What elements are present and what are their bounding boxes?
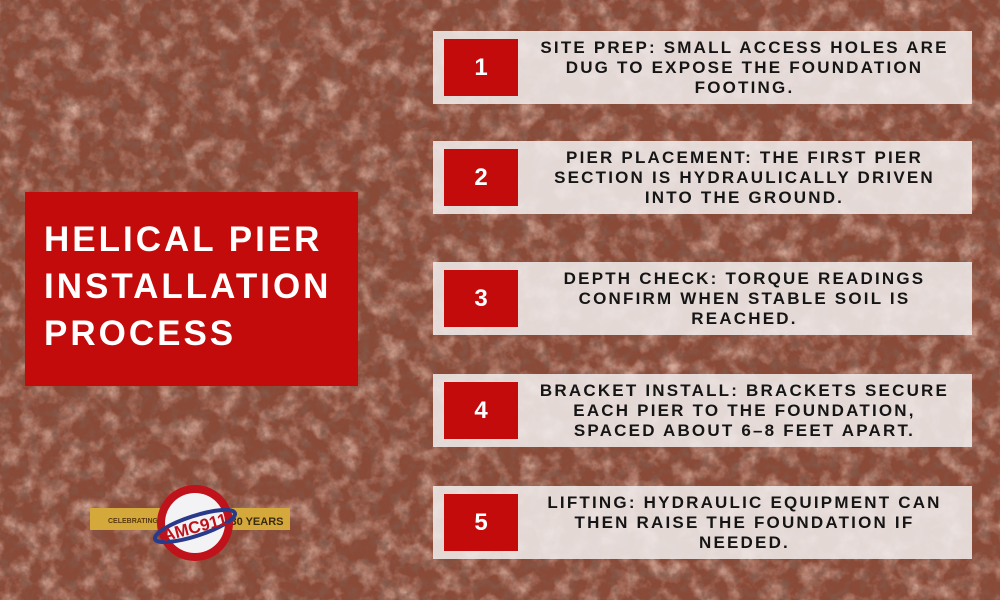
logo: CELEBRATING bbox=[108, 518, 159, 525]
step 5: 5 bbox=[474, 508, 488, 536]
step 1 bbox=[433, 31, 972, 104]
title: PROCESS bbox=[44, 314, 236, 353]
logo bbox=[90, 485, 290, 561]
step 3: 3 bbox=[474, 284, 488, 312]
step 5 bbox=[433, 486, 972, 559]
logo: 30 YEARS bbox=[230, 516, 284, 528]
title: INSTALLATION bbox=[44, 267, 331, 306]
step 4: 4 bbox=[474, 396, 488, 424]
step 4 bbox=[433, 374, 972, 447]
step 2 bbox=[433, 141, 972, 214]
step 3 bbox=[433, 262, 972, 335]
step 1: SITE PREP: SMALL ACCESS HOLES ARE DUG TO EXPOSE THE FOUNDATION FOOTING. bbox=[540, 38, 949, 96]
step 2: PIER PLACEMENT: THE FIRST PIER SECTION IS HYDRAULICALLY DRIVEN INTO THE GROUND. bbox=[554, 148, 935, 206]
step 1: 1 bbox=[474, 54, 488, 80]
logo: AMC911 bbox=[160, 510, 229, 545]
step 4: BRACKET INSTALL: BRACKETS SECURE EACH PIER TO THE FOUNDATION, SPACED ABOUT 6–8 FEET APART. bbox=[540, 380, 949, 440]
title bbox=[25, 192, 358, 386]
step 3: DEPTH CHECK: TORQUE READINGS CONFIRM WHEN STABLE SOIL IS REACHED. bbox=[564, 268, 925, 328]
title: HELICAL PIER bbox=[44, 220, 322, 259]
step 2: 2 bbox=[474, 164, 488, 190]
step 5: LIFTING: HYDRAULIC EQUIPMENT CAN THEN RAISE THE FOUNDATION IF NEEDED. bbox=[547, 492, 942, 552]
